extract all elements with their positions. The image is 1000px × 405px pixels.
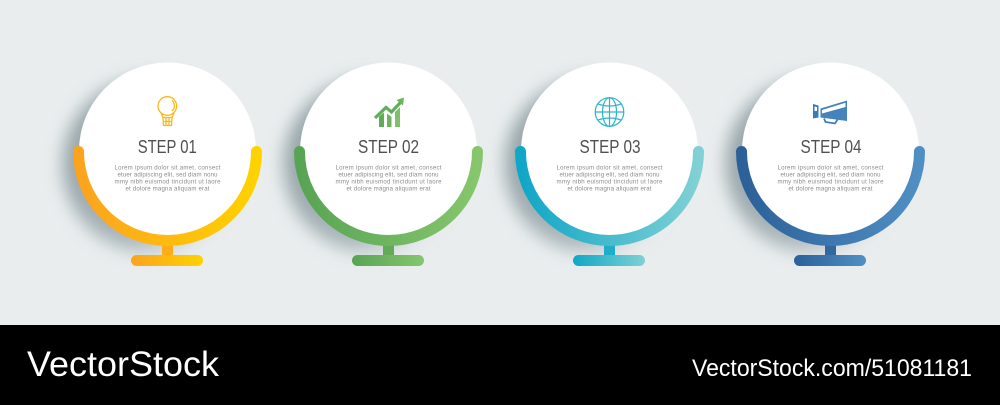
stand stem 3 [604, 244, 615, 257]
icon: megaphone [813, 100, 847, 124]
stand stem 4 [825, 244, 836, 257]
body text 1: Lorem ipsum dolor sit amet, consect [114, 164, 221, 172]
body text 3: mmy nibh euismod tincidunt ut laore [556, 178, 663, 186]
panel: step 02 [284, 62, 478, 266]
shadow 4 [726, 77, 902, 253]
stand base 2 [352, 255, 424, 266]
stand stem 2 [383, 244, 394, 257]
body text 3: etuer adipiscing elit, sed diam nonu [560, 172, 660, 178]
arc 4 [742, 152, 920, 240]
stand base 3 [573, 255, 645, 266]
body text 1: et dolore magna aliquam erat [126, 186, 210, 192]
heading 4: STEP 04 [800, 137, 862, 157]
body text 1: etuer adipiscing elit, sed diam nonu [118, 172, 218, 178]
shadow 2 [284, 77, 460, 253]
circle 2 [300, 62, 477, 240]
footer logo text: VectorStock [27, 345, 220, 384]
stand base 1 [131, 255, 203, 266]
body text 1: mmy nibh euismod tincidunt ut laore [114, 178, 221, 186]
body text 3 [556, 164, 663, 192]
heading 1: STEP 01 [138, 137, 197, 157]
panel: step 04 [726, 62, 920, 266]
body text 2 [336, 164, 442, 192]
circle 4 [742, 62, 919, 240]
body text 2: et dolore magna aliquam erat [346, 186, 431, 192]
circle 1 [79, 62, 256, 240]
body text 1 [114, 164, 221, 192]
icon: globe [595, 98, 624, 126]
stand base 4 [794, 255, 866, 266]
icon: growth chart [375, 98, 404, 127]
circle 3 [521, 62, 698, 240]
heading 3: STEP 03 [580, 137, 640, 157]
panel: step 03 [505, 62, 698, 266]
footer bar [0, 325, 1000, 405]
panel: step 01 [63, 62, 256, 266]
body text 3: Lorem ipsum dolor sit amet, consect [556, 164, 663, 172]
body text 3: et dolore magna aliquam erat [568, 186, 652, 192]
stand stem 1 [162, 244, 173, 257]
shadow 1 [63, 77, 239, 253]
footer url text: VectorStock.com/51081181 [692, 355, 972, 382]
body text 2: Lorem ipsum dolor sit amet, consect [336, 164, 442, 172]
heading 2: STEP 02 [358, 137, 419, 157]
shadow 3 [505, 77, 681, 253]
body text 4: Lorem ipsum dolor sit amet, consect [778, 164, 884, 172]
arc 2 [300, 152, 478, 240]
body text 2: mmy nibh euismod tincidunt ut laore [336, 178, 442, 186]
icon: lightbulb [158, 97, 177, 126]
arc 3 [520, 152, 698, 240]
body text 4 [778, 164, 884, 192]
body text 2: etuer adipiscing elit, sed diam nonu [338, 172, 438, 178]
body text 4: etuer adipiscing elit, sed diam nonu [780, 172, 880, 178]
arc 1 [78, 152, 256, 240]
body text 4: et dolore magna aliquam erat [788, 186, 873, 192]
body text 4: mmy nibh euismod tincidunt ut laore [778, 178, 884, 186]
